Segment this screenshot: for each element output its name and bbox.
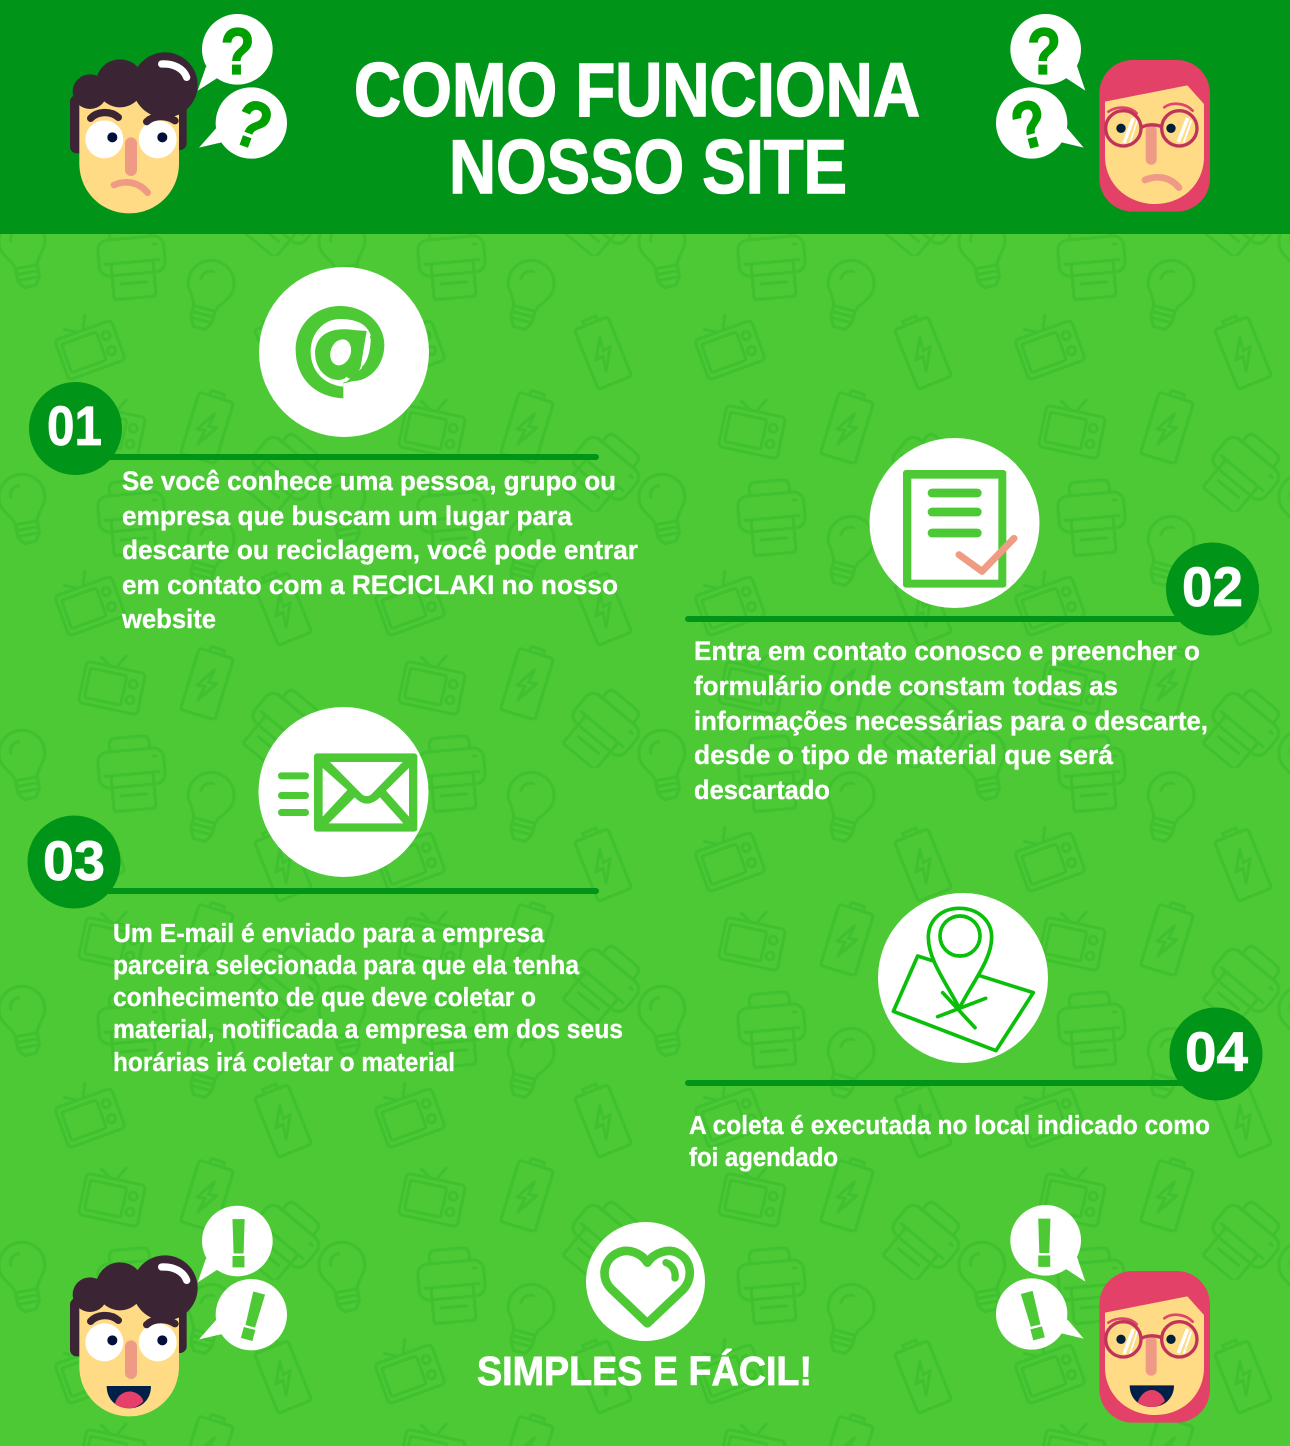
step 3 number badge bbox=[28, 816, 120, 908]
step 1 text: website bbox=[121, 604, 216, 634]
step 2 text: descartado bbox=[694, 775, 830, 805]
step 4 number badge bbox=[1170, 1008, 1262, 1100]
step 1 divider line bbox=[100, 454, 599, 460]
step 2 text: Entra em contato conosco e preencher o bbox=[694, 636, 1200, 666]
step 3 text: horárias irá coletar o material bbox=[113, 1049, 455, 1077]
icon: at sign bbox=[259, 267, 429, 437]
step 3 text: material, notificada a empresa em dos seus bbox=[113, 1016, 623, 1044]
speech bubbles: man exclamations: ! bbox=[228, 1206, 250, 1280]
character: happy man bbox=[70, 1255, 198, 1416]
speech bubbles: man questions bbox=[198, 14, 287, 165]
step 4 divider line bbox=[685, 1080, 1190, 1086]
step 1 text: Se você conhece uma pessoa, grupo ou bbox=[122, 466, 616, 496]
step 2 text: informações necessárias para o descarte, bbox=[694, 706, 1208, 736]
step 1 text: descarte ou reciclagem, você pode entrar bbox=[122, 535, 638, 565]
step 2 number badge: 02 bbox=[1182, 555, 1243, 618]
step 1 text bbox=[121, 466, 638, 634]
title: COMO FUNCIONA bbox=[354, 48, 920, 133]
step 1 number badge bbox=[29, 382, 122, 475]
step 4 text: A coleta é executada no local indicado como bbox=[689, 1112, 1210, 1140]
step 4 number badge: 04 bbox=[1185, 1020, 1248, 1083]
step 3 text: Um E-mail é enviado para a empresa bbox=[113, 920, 545, 948]
speech bubbles: man exclamations bbox=[198, 1206, 287, 1355]
step 1 number badge: 01 bbox=[47, 394, 102, 457]
step 1 text: em contato com a RECICLAKI no nosso bbox=[122, 570, 618, 600]
title bbox=[354, 48, 920, 210]
step 4 bbox=[685, 893, 1262, 1172]
speech bubbles: man questions: ? bbox=[224, 84, 282, 165]
step 2 text bbox=[694, 636, 1208, 805]
step 2 number badge bbox=[1166, 542, 1259, 636]
character: confused man bbox=[70, 52, 198, 213]
icon: checked document bbox=[870, 438, 1040, 608]
speech bubbles: man questions: ? bbox=[221, 14, 255, 88]
step 1 bbox=[29, 267, 638, 634]
speech bubbles: woman questions: ? bbox=[1004, 84, 1056, 164]
icon: map pin bbox=[878, 893, 1048, 1063]
speech bubbles: woman exclamations: ! bbox=[1013, 1277, 1053, 1354]
character: happy woman bbox=[1099, 1271, 1210, 1423]
speech bubbles: man exclamations: ! bbox=[233, 1277, 273, 1355]
step 3 text bbox=[113, 920, 623, 1077]
title: NOSSO SITE bbox=[449, 125, 847, 210]
step 2 text: formulário onde constam todas as bbox=[694, 671, 1118, 701]
speech bubbles: woman questions: ? bbox=[1027, 14, 1061, 88]
step 3 text: conhecimento de que deve coletar o bbox=[113, 984, 536, 1012]
step 2 text: desde o tipo de material que será bbox=[694, 740, 1114, 770]
icon: heart bbox=[586, 1222, 705, 1341]
step 2 bbox=[685, 438, 1259, 805]
header band bbox=[0, 0, 1290, 234]
step 3 bbox=[28, 707, 623, 1077]
closing headline: SIMPLES E FÁCIL! bbox=[477, 1348, 812, 1394]
step 3 number badge: 03 bbox=[43, 829, 105, 892]
step 2 divider line bbox=[685, 616, 1185, 622]
step 1 text: empresa que buscam um lugar para bbox=[122, 501, 573, 531]
step 3 text: parceira selecionada para que ela tenha bbox=[113, 952, 580, 980]
icon: sent envelope bbox=[258, 707, 428, 877]
step 4 text bbox=[689, 1112, 1210, 1172]
step 4 text: foi agendado bbox=[689, 1144, 838, 1172]
step 3 divider line bbox=[100, 888, 599, 894]
speech bubbles: woman questions bbox=[996, 14, 1085, 164]
speech bubbles: woman exclamations: ! bbox=[1033, 1205, 1055, 1279]
speech bubbles: woman exclamations bbox=[996, 1205, 1085, 1354]
character: confused woman bbox=[1099, 60, 1210, 212]
